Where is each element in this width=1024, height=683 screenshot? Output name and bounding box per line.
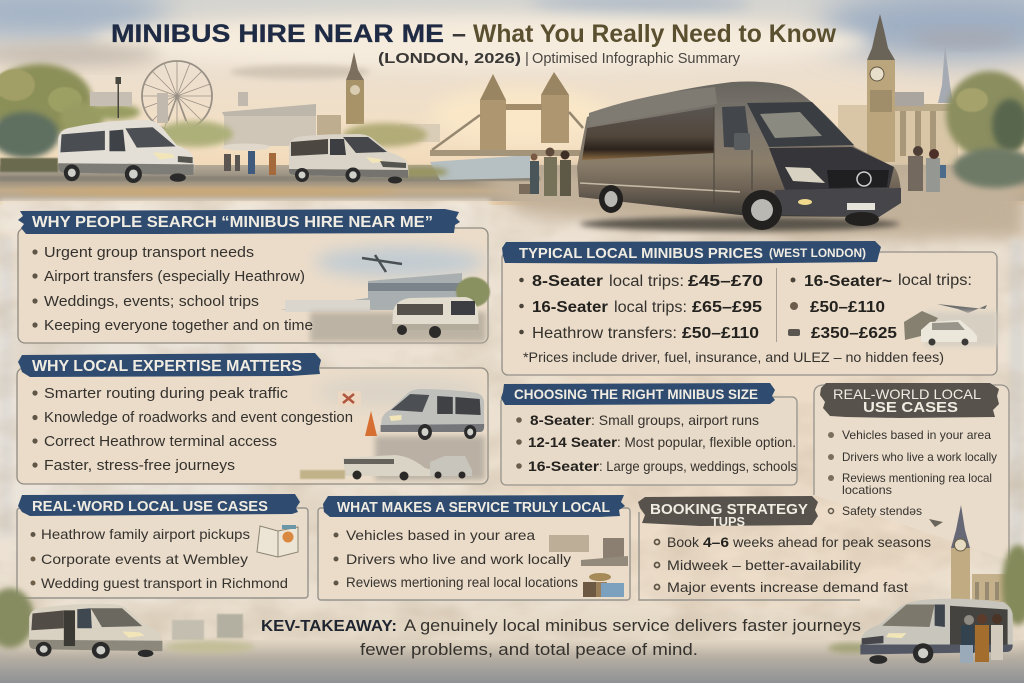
banner xyxy=(502,241,881,264)
bullet list: : Small groups, airport runs xyxy=(591,412,759,428)
left price list: £50–£110 xyxy=(682,325,759,342)
left price list: local trips: xyxy=(614,299,687,316)
banner xyxy=(638,496,818,526)
bullet list: Urgent group transport needs xyxy=(44,245,254,261)
banner xyxy=(323,495,625,517)
bullet list: Smarter routing during peak traffic xyxy=(44,386,288,402)
banner text: WHAT MAKES A SERVICE TRULY LOCAL xyxy=(337,500,610,516)
luggage icon xyxy=(583,573,624,597)
bullet list: 8-Seater xyxy=(530,412,592,428)
panel box xyxy=(17,508,308,598)
left price list: £45–£70 xyxy=(688,273,763,290)
bullet list xyxy=(516,412,797,474)
bullet list xyxy=(32,245,313,334)
banner text: WHY LOCAL EXPERTISE MATTERS xyxy=(32,358,302,375)
bullet list xyxy=(30,526,288,591)
banner xyxy=(820,383,999,418)
bullet list: Major events increase demand fast xyxy=(667,579,908,595)
title: What You Really Need to Know xyxy=(473,20,837,48)
left price list xyxy=(519,273,763,342)
left price list: Heathrow transfers: xyxy=(532,325,677,342)
right price list: 16-Seater~ xyxy=(804,273,892,290)
bullet list: weeks ahead for peak seasons xyxy=(732,534,931,550)
banner text: USE CASES xyxy=(863,399,958,416)
panel box xyxy=(639,512,860,600)
main dark van xyxy=(577,82,901,231)
people by large van xyxy=(908,146,946,192)
panel: what makes a service truly local xyxy=(318,495,630,600)
London Eye xyxy=(142,61,212,131)
bullet list: : Most popular, flexible option. xyxy=(617,434,796,450)
silver van with cone xyxy=(381,389,484,440)
banner text: CHOOSING THE RIGHT MINIBUS SIZE xyxy=(514,386,758,402)
small Big Ben xyxy=(346,52,364,124)
banner text: WHY PEOPLE SEARCH “MINIBUS HIRE NEAR ME” xyxy=(32,214,433,231)
Tower Bridge xyxy=(430,72,583,156)
subtitle: Optimised Infographic Summary xyxy=(532,50,740,67)
bullet list: 4–6 xyxy=(703,534,729,550)
banner xyxy=(501,383,775,405)
landmark icons xyxy=(549,535,628,566)
right price list: £350–£625 xyxy=(811,325,897,342)
banner xyxy=(18,353,321,377)
bullet list: Book xyxy=(667,534,700,550)
panel: typical local minibus prices xyxy=(502,241,997,375)
panel: real word local use cases xyxy=(17,494,308,598)
bullet list: Airport transfers (especially Heathrow) xyxy=(44,269,305,285)
key takeaway xyxy=(261,617,861,659)
panel box xyxy=(18,228,488,343)
map icon xyxy=(257,525,298,557)
bullet list: Midweek – better-availability xyxy=(667,557,861,573)
left price list: 16-Seater xyxy=(532,299,608,316)
bullet list: locations xyxy=(842,483,892,497)
banner text xyxy=(833,386,981,416)
people by white van xyxy=(224,151,276,175)
bottom left bush and skyline xyxy=(0,588,255,653)
small vans xyxy=(300,455,472,480)
panel box xyxy=(17,368,488,484)
subtitle xyxy=(378,50,740,67)
bullet list: Heathrow family airport pickups xyxy=(41,526,250,542)
bullet list: Reviews mertioning real local locations xyxy=(346,575,578,590)
subtitle: | xyxy=(525,50,529,67)
panel box xyxy=(318,508,630,600)
right Big Ben xyxy=(951,505,1024,625)
bullet list: Vehicles based in your area xyxy=(346,527,535,543)
banner text xyxy=(650,502,808,529)
road scene xyxy=(315,376,485,480)
The Shard xyxy=(938,45,953,103)
panel: why local expertise matters xyxy=(17,353,488,484)
bullet list: Safety stendəs xyxy=(842,504,922,518)
mid-ground trees xyxy=(157,121,448,177)
left price list: £65–£95 xyxy=(692,299,762,316)
panel box xyxy=(501,397,797,485)
key takeaway: KEV-TAKEAWAY: xyxy=(261,618,397,635)
panel: why people search xyxy=(18,209,490,343)
people with luggage xyxy=(519,148,571,196)
panel: choosing the right minibus size xyxy=(501,383,797,485)
bullet list: Reviews mentioning rea local xyxy=(842,471,992,485)
right price list xyxy=(788,272,972,342)
bullet list: Faster, stress-free journeys xyxy=(44,458,235,474)
right price list: local trips: xyxy=(898,272,972,289)
banner text: TYPICAL LOCAL MINIBUS PRICES xyxy=(519,245,763,262)
airport scene xyxy=(280,246,490,342)
left tree group xyxy=(0,64,140,172)
bullet list: Vehicles based in your area xyxy=(842,428,991,442)
paper plane xyxy=(929,519,943,527)
title: MINIBUS HIRE NEAR ME xyxy=(111,20,444,48)
bullet list xyxy=(828,428,997,518)
bullet list: Corporate events at Wembley xyxy=(41,551,248,567)
title xyxy=(111,20,837,48)
price note: *Prices include driver, fuel, insurance, and ULEZ – no hidden fees) xyxy=(523,349,944,365)
banner xyxy=(18,209,460,234)
bullet list: Knowledge of roadworks and event congestion xyxy=(44,410,353,426)
bullet list: Correct Heathrow terminal access xyxy=(44,434,277,450)
bottom right van with passengers xyxy=(828,599,1013,664)
silver van xyxy=(289,134,408,184)
key takeaway: A genuinely local minibus service delivers faster journeys xyxy=(404,617,861,635)
right tree xyxy=(946,71,1024,188)
bullet list: 16-Seater xyxy=(528,458,600,474)
right price list: £50–£110 xyxy=(810,299,885,316)
distant buildings xyxy=(90,77,440,146)
bullet list: 12-14 Seater xyxy=(528,434,618,450)
plane and car illustration xyxy=(904,304,997,346)
banner text: REAL-WORLD LOCAL xyxy=(833,386,981,402)
banner text: REAL·WORD LOCAL USE CASES xyxy=(32,499,268,515)
panel box xyxy=(814,385,1009,560)
rear-view minibus xyxy=(392,297,479,338)
bullet list: Keeping everyone together and on time xyxy=(44,318,313,334)
bullet list: Wedding guest transport in Richmond xyxy=(41,575,288,591)
left price list: local trips: xyxy=(609,273,684,290)
title: – xyxy=(452,20,466,48)
bullet list: : Large groups, weddings, schools xyxy=(599,458,797,474)
panel: real-world local use cases xyxy=(814,383,1009,560)
banner text: (WEST LONDON) xyxy=(769,246,866,260)
panel box xyxy=(502,252,997,375)
bullet list: Drivers who live and work locally xyxy=(346,551,571,567)
bottom left van xyxy=(29,604,162,659)
banner text: BOOKING STRATEGY xyxy=(650,502,808,518)
white van xyxy=(58,120,194,183)
column divider xyxy=(776,268,777,342)
bullet list xyxy=(32,386,353,474)
bullet list: Weddings, events; school trips xyxy=(44,294,259,310)
banner xyxy=(18,494,300,516)
banner text: TUPS xyxy=(711,514,745,529)
large Big Ben and Parliament xyxy=(838,14,958,163)
subtitle: (LONDON, 2026) xyxy=(378,50,521,67)
bullet list xyxy=(334,527,578,590)
left price list: 8-Seater xyxy=(532,273,603,290)
bullet list: Drivers who live a work locally xyxy=(842,450,997,464)
panel: booking strategy tips xyxy=(638,496,931,600)
bullet list xyxy=(654,534,931,595)
key takeaway: fewer problems, and total peace of mind. xyxy=(360,641,698,659)
